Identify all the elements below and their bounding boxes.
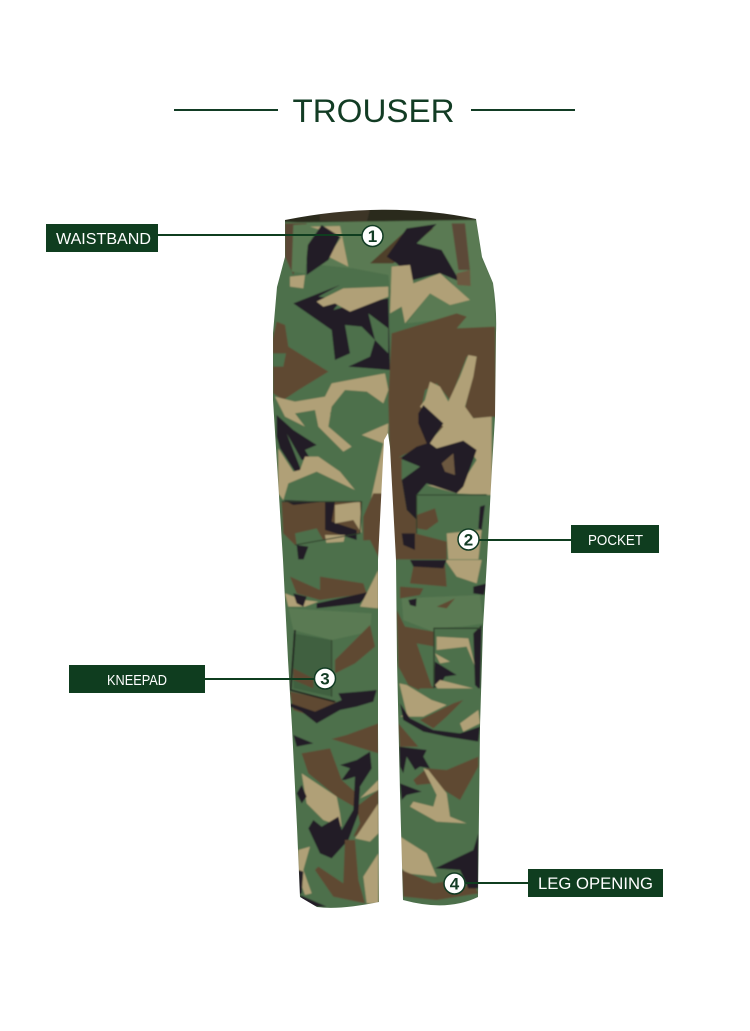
label: pocket: POCKET <box>588 533 643 549</box>
marker 3 <box>314 668 336 689</box>
label: leg opening: LEG OPENING <box>538 875 653 893</box>
label: waistband: WAISTBAND <box>56 231 151 248</box>
marker 4 <box>444 873 465 894</box>
trousers illustration <box>273 210 496 908</box>
label: leg opening <box>465 869 663 897</box>
right pocket flap <box>476 494 487 496</box>
title: TROUSER <box>292 93 454 129</box>
marker 2 <box>458 529 479 550</box>
lower camouflage <box>283 559 487 907</box>
left pocket flap <box>282 502 362 545</box>
marker 3: 3 <box>320 670 330 688</box>
label: kneepad: KNEEPAD <box>107 673 167 689</box>
marker 1: 1 <box>368 227 377 246</box>
label: waistband <box>46 224 363 252</box>
label: pocket <box>478 525 659 553</box>
marker 4: 4 <box>450 874 460 894</box>
upper camouflage <box>273 207 496 560</box>
marker 1 <box>362 226 383 246</box>
marker 2: 2 <box>464 530 473 550</box>
label: kneepad <box>69 665 315 693</box>
